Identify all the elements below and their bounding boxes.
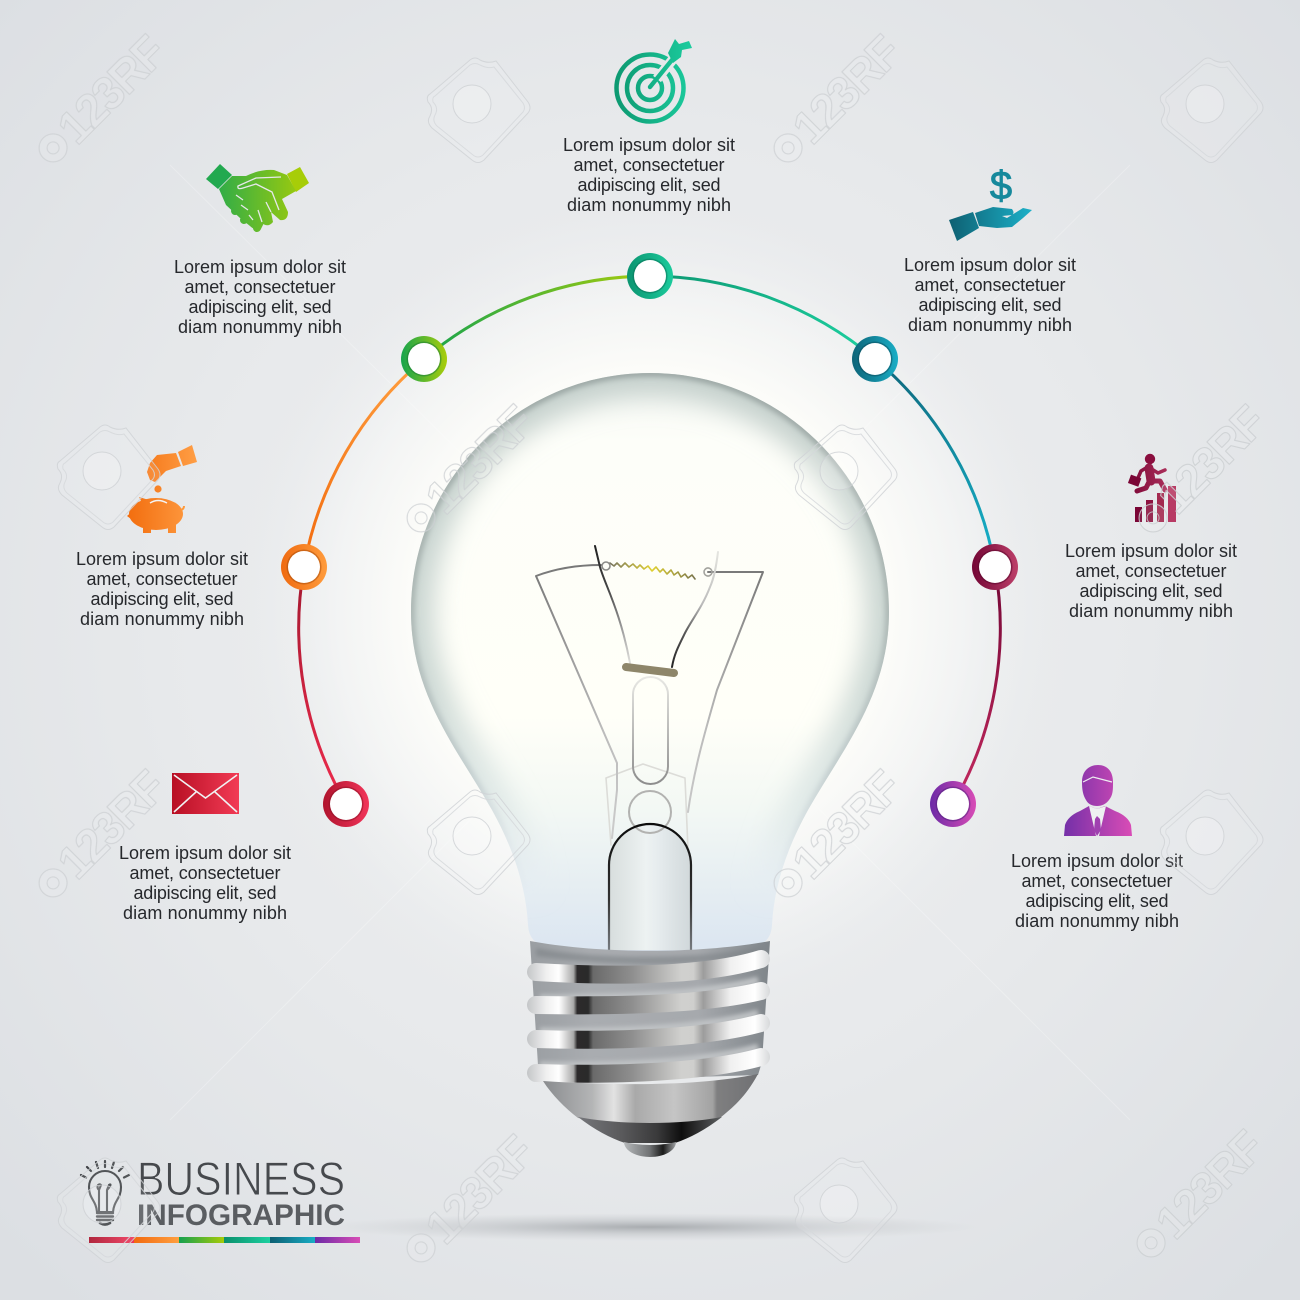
- text: handshake: adipiscing elit, sed: [188, 297, 332, 317]
- text: money: Lorem ipsum dolor sit: [904, 255, 1076, 275]
- text: piggy bank: Lorem ipsum dolor sit: [76, 549, 248, 569]
- text: piggy bank: amet, consectetuer: [86, 569, 238, 589]
- text: businessman: Lorem ipsum dolor sit: [1011, 851, 1183, 871]
- text: businessman: amet, consectetuer: [1022, 871, 1172, 891]
- text: target: diam nonummy nibh: [567, 195, 731, 215]
- text: businessman: [1011, 851, 1183, 931]
- text: runner: [1065, 541, 1237, 621]
- text: envelope: amet, consectetuer: [130, 863, 280, 883]
- node: piggy bank: [281, 544, 327, 590]
- text: piggy bank: [76, 549, 248, 629]
- icon: runner on bar chart: [1128, 454, 1176, 522]
- text: piggy bank: adipiscing elit, sed: [90, 589, 234, 609]
- text: handshake: [174, 257, 346, 337]
- logo colour bar: [89, 1237, 360, 1243]
- text: money: adipiscing elit, sed: [918, 295, 1062, 315]
- logo subtitle: INFOGRAPHIC: [137, 1199, 345, 1232]
- bulb stem and filament: [536, 546, 763, 950]
- text: runner: Lorem ipsum dolor sit: [1065, 541, 1237, 561]
- node: handshake: [401, 336, 447, 382]
- bulb glass: [411, 373, 889, 954]
- icon: logo bulb: [81, 1161, 129, 1224]
- bulb screw base: [530, 941, 770, 1157]
- icon: piggy bank: [127, 445, 197, 533]
- text: handshake: Lorem ipsum dolor sit: [174, 257, 346, 277]
- text: handshake: amet, consectetuer: [184, 277, 336, 297]
- text: businessman: adipiscing elit, sed: [1026, 891, 1168, 911]
- logo: business infographic: [81, 1152, 360, 1243]
- text: target: amet, consectetuer: [574, 155, 724, 175]
- text: money: amet, consectetuer: [914, 275, 1066, 295]
- text: target: Lorem ipsum dolor sit: [563, 135, 735, 155]
- text: runner: adipiscing elit, sed: [1080, 581, 1222, 601]
- text: businessman: diam nonummy nibh: [1015, 911, 1179, 931]
- text: envelope: adipiscing elit, sed: [134, 883, 276, 903]
- text: envelope: diam nonummy nibh: [123, 903, 287, 923]
- connector arc: [299, 276, 1000, 804]
- text: target: adipiscing elit, sed: [578, 175, 720, 195]
- text: envelope: Lorem ipsum dolor sit: [119, 843, 291, 863]
- icon: target with arrow: [616, 39, 692, 122]
- text: envelope: [119, 843, 291, 923]
- icon: handshake: [206, 164, 309, 229]
- floor shadow under the bulb: [320, 1213, 980, 1241]
- node: mail: [323, 781, 369, 827]
- node: money: [852, 336, 898, 382]
- light bulb: [411, 373, 889, 1157]
- node: person: [930, 781, 976, 827]
- icon: hand holding dollar: [949, 164, 1032, 241]
- icon: envelope: [172, 773, 239, 814]
- text: money: [904, 255, 1076, 335]
- text: runner: diam nonummy nibh: [1069, 601, 1233, 621]
- node: runner: [972, 544, 1018, 590]
- text: runner: amet, consectetuer: [1076, 561, 1226, 581]
- text: piggy bank: diam nonummy nibh: [80, 609, 244, 629]
- node: target: [627, 253, 673, 299]
- text: handshake: diam nonummy nibh: [178, 317, 342, 337]
- icon: hand holding dollar: $: [990, 164, 1012, 208]
- logo title: BUSINESS: [137, 1152, 345, 1205]
- text: money: diam nonummy nibh: [908, 315, 1072, 335]
- text: target: [563, 135, 735, 215]
- icon: businessman: [1064, 765, 1132, 836]
